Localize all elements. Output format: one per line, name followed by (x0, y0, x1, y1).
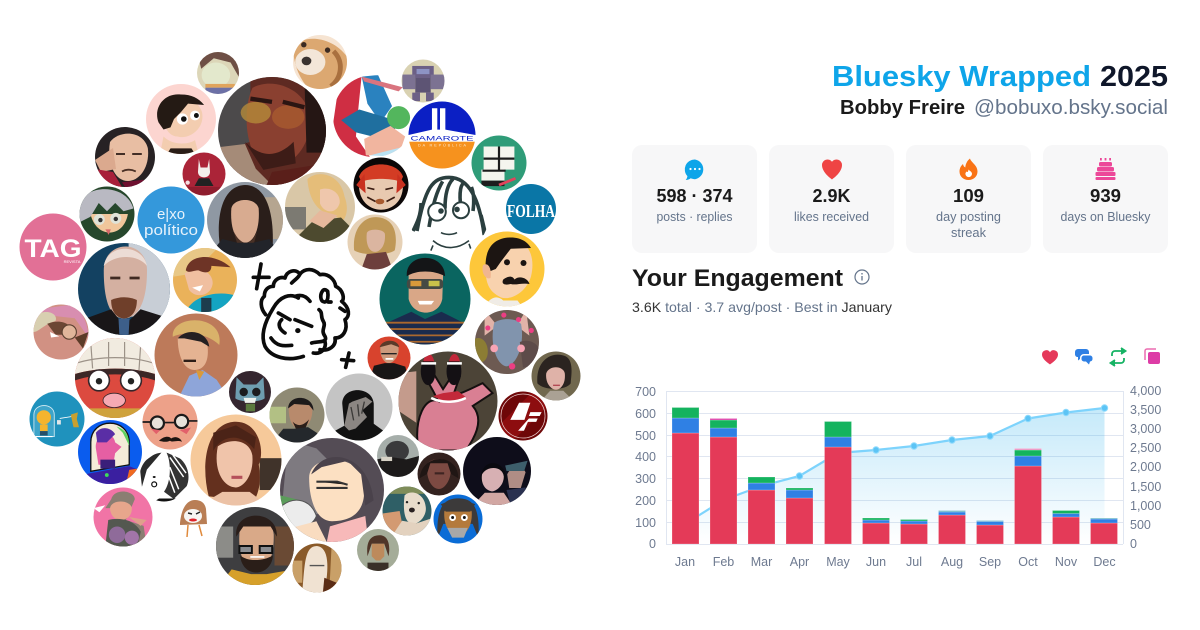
avatar: hooded figure (326, 374, 392, 440)
avatar: black and white drawn face (140, 452, 188, 502)
month labels: Nov (1055, 555, 1078, 569)
right axis labels: 2,000 (1130, 460, 1161, 474)
avatar: Camarote da Republica logo: CAMAROTE (411, 136, 473, 142)
avatar: eixo politico logo: político (144, 222, 198, 239)
month labels: Mar (751, 555, 772, 569)
panel: stat streak: streak (951, 226, 987, 240)
avatar: Folha logo: FOLHA (507, 201, 555, 221)
cumulative area (685, 408, 1104, 544)
avatar: eixo politico logo: e|xo (157, 206, 185, 223)
avatar: tree and grey landscape (377, 435, 419, 477)
avatar: man with tinted glasses (218, 77, 326, 185)
right axis labels: 4,000 (1130, 384, 1161, 398)
left axis labels: 700 (635, 385, 656, 399)
avatar: dim-lit woman (418, 452, 460, 496)
month labels: Feb (713, 555, 734, 569)
avatar: cartoon on pink (146, 84, 216, 154)
avatar: pixel art person (357, 529, 399, 571)
right axis labels: 2,500 (1130, 441, 1161, 455)
right axis labels: 1,000 (1130, 499, 1161, 513)
panel: stat streak (906, 145, 1031, 253)
bar: Jul (900, 520, 928, 544)
cumulative line (685, 405, 1108, 524)
left axis labels: 600 (635, 407, 656, 421)
left axis labels: 100 (635, 516, 656, 530)
avatar: curly-haired woman (532, 352, 580, 400)
stacked bars (672, 408, 1118, 544)
avatar: white dog on teal couch (382, 486, 432, 536)
bar: Aug (938, 510, 966, 544)
avatar: hand over mug illustration (280, 438, 384, 542)
avatar: blue cat (229, 371, 271, 413)
panel: avatar bubble cluster (20, 35, 580, 592)
icon: speech bubble (685, 159, 703, 180)
right axis labels: 500 (1130, 518, 1151, 532)
grid lines and axes (666, 391, 1124, 544)
month labels: Apr (790, 555, 809, 569)
month labels: Sep (979, 555, 1001, 569)
panel: stat likes (769, 145, 894, 253)
bar: May (824, 422, 852, 544)
avatar: golden dog (293, 35, 347, 89)
icon: birthday cake (1096, 158, 1116, 180)
title: 2025 (1100, 61, 1168, 93)
panel: stat posts and replies: posts · replies (656, 210, 732, 224)
icon: likes heart (1042, 350, 1058, 364)
panel: stat days on Bluesky (1043, 145, 1168, 253)
bar: Jan (672, 408, 699, 544)
avatar: man with glasses and yellow shirt (216, 507, 294, 585)
panel: stat posts and replies: 598 · 374 (656, 186, 732, 206)
month labels: Aug (941, 555, 963, 569)
bar: Oct (1014, 448, 1042, 544)
month labels: Jul (906, 555, 922, 569)
avatar: man with hand over eye (95, 127, 155, 187)
avatar: mustache man on yellow (470, 232, 544, 306)
avatar: cat drawing (197, 52, 239, 94)
panel: stat streak: 109 (953, 186, 984, 206)
avatar: BKS green logo (472, 136, 526, 190)
left axis labels: 300 (635, 472, 656, 486)
avatar: long-haired man (207, 182, 283, 258)
avatar: blonde woman (285, 172, 355, 242)
bar: Jun (862, 518, 890, 544)
panel: stat posts and replies (632, 145, 757, 253)
icon: reposts arrows (1110, 348, 1126, 366)
left axis labels: 200 (635, 494, 656, 508)
right axis labels: 3,000 (1130, 422, 1161, 436)
month labels: Dec (1093, 555, 1116, 569)
chart: monthly engagement stacked bars with cumulative line (635, 384, 1161, 569)
avatar: goth woman at night (463, 437, 531, 505)
avatar: red-haired face (354, 158, 408, 212)
avatar: face with pink hearts (475, 310, 539, 374)
left axis labels (635, 385, 656, 551)
icon: heart (822, 159, 842, 180)
user name and handle: Bobby Freire (840, 97, 965, 119)
avatar: silver-haired anime (80, 186, 134, 242)
month labels: May (826, 555, 851, 569)
avatar: glasses and mustache (142, 394, 198, 450)
month labels (675, 555, 1116, 569)
icon: info (855, 270, 869, 284)
bar: Apr (786, 488, 813, 544)
avatar: small brown-haired doodle (180, 500, 207, 537)
left axis labels: 0 (649, 537, 656, 551)
avatar: man on orange wall (368, 336, 410, 380)
panel: stat days on Bluesky: days on Bluesky (1060, 210, 1151, 224)
avatar: pixel robot (402, 60, 444, 102)
avatar: TAG logo (20, 214, 86, 280)
avatar: Camarote da Republica logo: DA REPÚBLICA (418, 142, 466, 147)
avatar: pink illustration of man (94, 488, 152, 546)
right axis labels (1130, 384, 1161, 551)
avatar: hollow knight (182, 152, 226, 196)
right axis labels: 3,500 (1130, 403, 1161, 417)
heading: your engagement: Your Engagement (632, 265, 843, 292)
avatar: doodled head with plus signs (253, 264, 354, 367)
avatar: TAG logo: REVISTA (64, 259, 81, 264)
avatar: bald man in suit (78, 243, 170, 335)
bar: Sep (976, 520, 1004, 544)
right axis labels: 1,500 (1130, 480, 1161, 494)
avatar: 4F red badge (498, 392, 548, 440)
avatar: Camarote da Republica logo (408, 102, 476, 168)
avatar: curly blonde person (348, 214, 402, 270)
panel: stat streak: day posting (936, 210, 1001, 224)
user name and handle: @bobuxo.bsky.social (974, 97, 1168, 119)
right axis labels: 0 (1130, 537, 1137, 551)
chart legend icons (1042, 348, 1160, 366)
bar: Feb (710, 418, 737, 544)
avatar: white-haired figure in sepia (292, 544, 342, 592)
avatar: man in truck (270, 388, 324, 442)
avatar: pink creature with santa hats (398, 352, 498, 450)
avatar: blue robot (78, 420, 142, 484)
bar: Mar (748, 477, 775, 544)
avatar: eixo politico logo (138, 186, 204, 254)
avatar: TAG logo: TAG (24, 235, 82, 263)
panel: stat likes: likes received (794, 210, 869, 224)
icon: flame (960, 158, 978, 180)
title: Bluesky Wrapped (832, 61, 1091, 93)
icon: quotes copies (1145, 349, 1160, 364)
month labels: Oct (1018, 555, 1038, 569)
left axis labels: 500 (635, 429, 656, 443)
icon: replies bubbles (1075, 349, 1092, 364)
avatar: woman with pink bandana (34, 304, 88, 360)
avatar: colourful manga figures (333, 75, 415, 157)
engagement summary text: 3.6K total · 3.7 avg/post · Best in January (632, 299, 892, 315)
month labels: Jun (866, 555, 886, 569)
left axis labels: 400 (635, 450, 656, 464)
avatar: cartoon boy (173, 248, 237, 312)
avatar: man with straw hat (154, 314, 238, 396)
panel: stat likes: 2.9K (812, 186, 850, 206)
avatar: sketched girl (412, 176, 486, 251)
avatar: Folha logo (506, 184, 556, 234)
bar: Dec (1090, 518, 1118, 544)
panel: stat days on Bluesky: 939 (1090, 186, 1121, 206)
user name and handle (840, 97, 1168, 119)
avatar: man with sunglasses on teal (380, 254, 470, 344)
month labels: Jan (675, 555, 695, 569)
avatar: woman with elf ears (190, 414, 282, 506)
avatar: lightbulb in cage (30, 392, 84, 446)
avatar: red character with chef hat (75, 338, 155, 418)
bar: Nov (1052, 510, 1080, 544)
avatar: cartoon man on blue (434, 494, 482, 544)
